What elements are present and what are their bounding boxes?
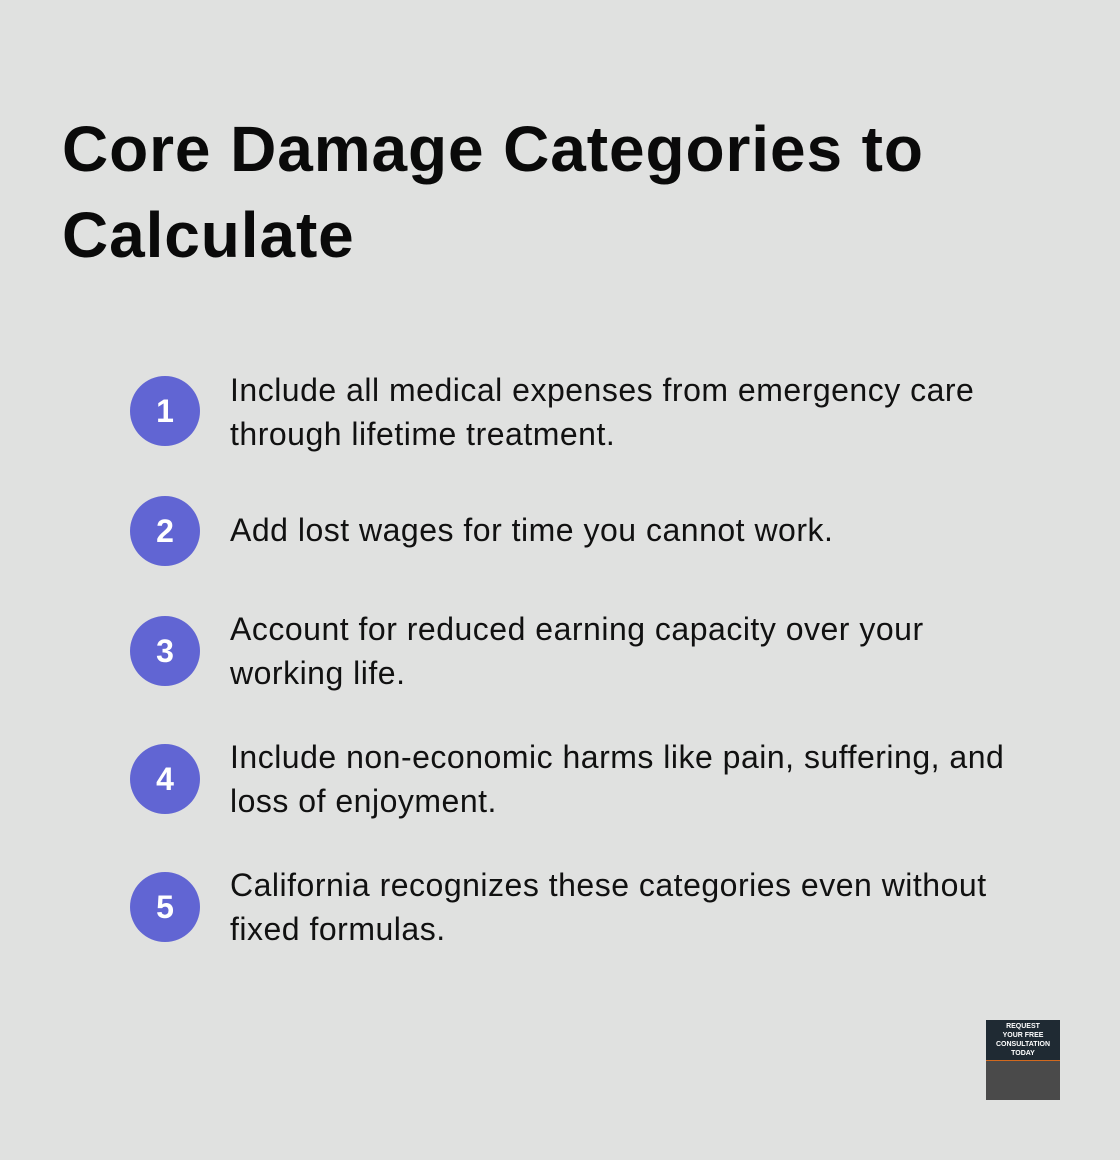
text 1: Include all medical expenses from emergency care bbox=[230, 372, 974, 408]
icon: number 1 bbox=[130, 376, 200, 446]
step 4 bbox=[130, 739, 1004, 819]
icon: number 4 bbox=[130, 744, 200, 814]
text 4: Include non-economic harms like pain, suffering, and bbox=[230, 739, 1004, 775]
icon: number 5 bbox=[130, 872, 200, 942]
step 3 bbox=[130, 611, 924, 691]
text 4 bbox=[230, 739, 1004, 819]
step 5 bbox=[130, 867, 987, 947]
text 3: Account for reduced earning capacity over your bbox=[230, 611, 924, 647]
text 3 bbox=[230, 611, 924, 691]
icon: number 5: 5 bbox=[156, 889, 174, 925]
logo badge: CONSULTATION bbox=[996, 1041, 1050, 1048]
logo badge bbox=[986, 1020, 1060, 1100]
icon: number 3: 3 bbox=[156, 633, 174, 669]
logo badge: REQUEST bbox=[1006, 1023, 1040, 1030]
text 3: working life. bbox=[230, 655, 405, 691]
text 5: California recognizes these categories even without bbox=[230, 867, 987, 903]
icon: number 2 bbox=[130, 496, 200, 566]
text 5 bbox=[230, 867, 987, 947]
text 1: through lifetime treatment. bbox=[230, 416, 615, 452]
logo badge: YOUR FREE bbox=[1003, 1032, 1043, 1039]
title bbox=[62, 113, 924, 271]
text 1 bbox=[230, 372, 974, 452]
title: Core Damage Categories to bbox=[62, 113, 924, 185]
step 2 bbox=[130, 496, 833, 566]
icon: number 3 bbox=[130, 616, 200, 686]
icon: number 2: 2 bbox=[156, 513, 174, 549]
title: Calculate bbox=[62, 199, 355, 271]
text 5: fixed formulas. bbox=[230, 911, 446, 947]
text 2: Add lost wages for time you cannot work. bbox=[230, 512, 833, 548]
icon: number 4: 4 bbox=[156, 761, 174, 797]
text 4: loss of enjoyment. bbox=[230, 783, 497, 819]
logo badge: TODAY bbox=[1011, 1050, 1035, 1057]
icon: number 1: 1 bbox=[156, 393, 174, 429]
step 1 bbox=[130, 372, 974, 452]
